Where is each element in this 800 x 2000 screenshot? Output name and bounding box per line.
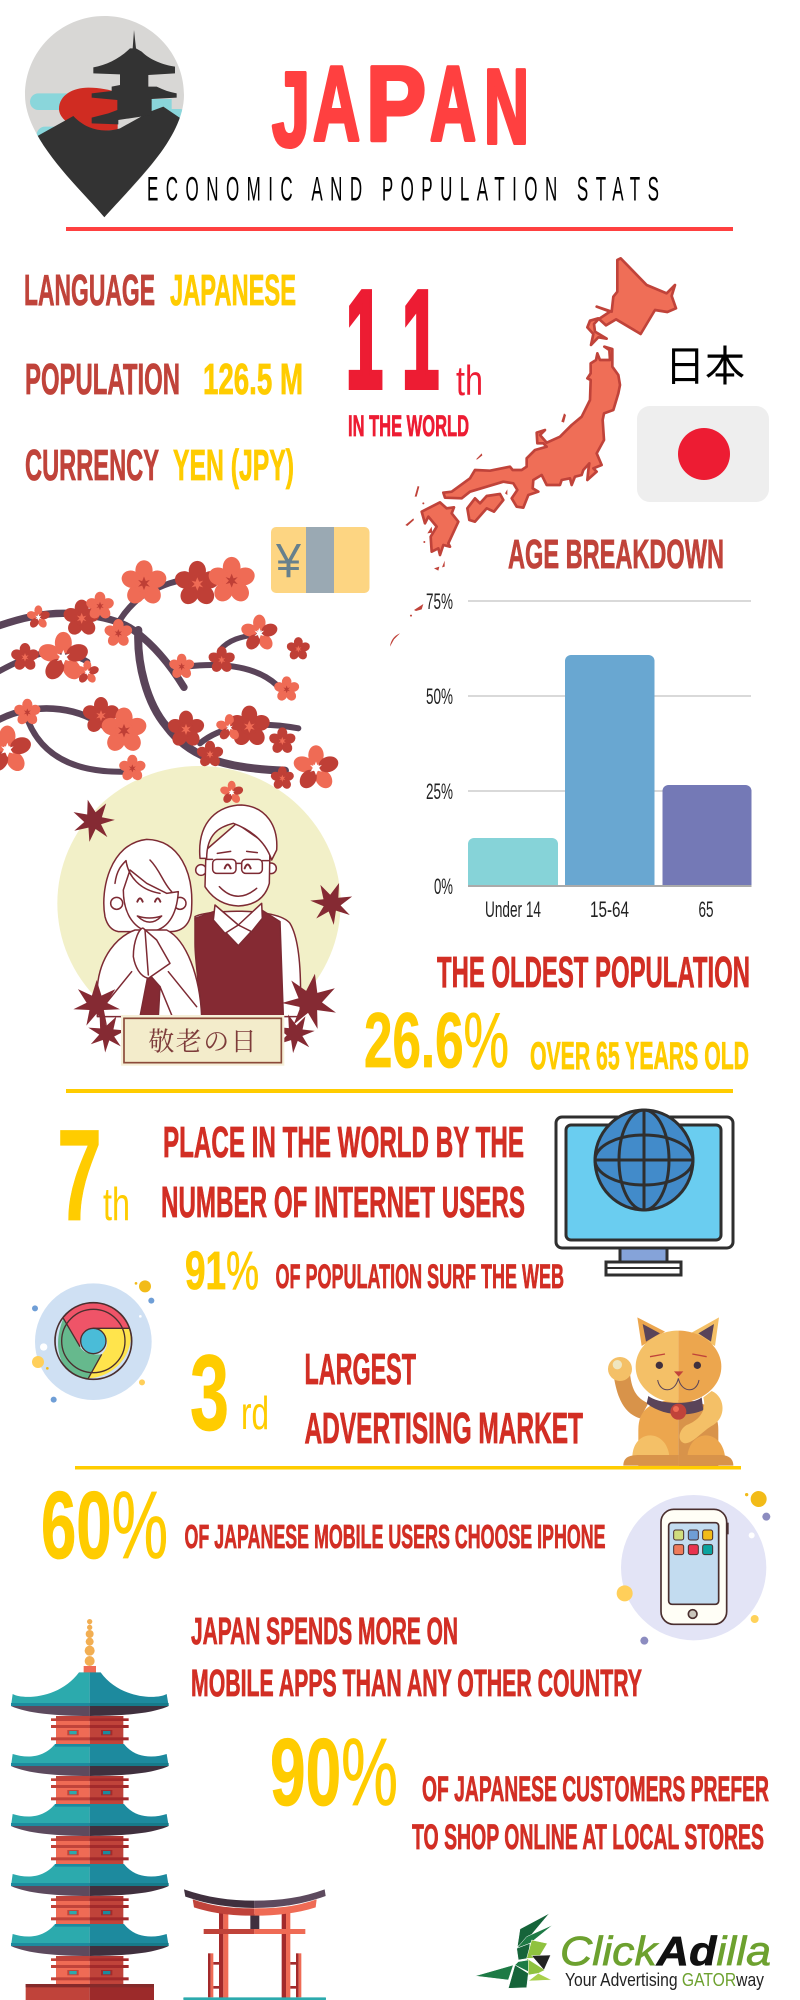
stat: currency: CURRENCY (25, 441, 159, 490)
stat: 90% local stores: 90% (270, 1719, 398, 1826)
stat: 11th in the world: 1 (346, 262, 383, 416)
subtitle: ECONOMIC AND POPULATION STATS (147, 170, 659, 208)
illustration: pagoda (11, 1619, 169, 2000)
illustration: elderly couple: 敬老の日 (148, 1022, 257, 1059)
stat: 60% iPhone (41, 1472, 606, 1579)
stat: 3rd: rd (241, 1387, 269, 1439)
title: A (430, 45, 476, 163)
stat: currency: YEN (JPY) (173, 441, 294, 490)
bar chart: age breakdown: 75% (426, 589, 453, 614)
yellow divider 2 (75, 1466, 741, 1470)
stat: 7th: 7 (57, 1102, 102, 1248)
stat: 7th: th (103, 1178, 130, 1230)
bar chart: age breakdown: 50% (426, 684, 453, 709)
yellow divider (66, 1089, 733, 1093)
stat: 11th in the world: IN THE WORLD (348, 410, 469, 443)
stat: language: JAPANESE (170, 266, 296, 315)
icon: smartphone (617, 1491, 770, 1645)
advertising market text: LARGEST (304, 1345, 416, 1394)
title: A (313, 45, 360, 163)
logo mark: origami gator (475, 1913, 553, 1988)
map of Japan (390, 258, 676, 647)
stat: 90% local stores (270, 1719, 769, 1857)
bar chart: age breakdown: 65 (698, 897, 714, 922)
advertising market text (304, 1345, 583, 1453)
advertising market text: ADVERTISING MARKET (304, 1404, 583, 1453)
logo: ClickAdilla (475, 1913, 771, 1990)
stat: 11th in the world: th (456, 357, 483, 404)
bar chart: age breakdown: 15-64 (590, 897, 629, 922)
stat: 26.6% over 65 (364, 996, 749, 1084)
stat: language: LANGUAGE (24, 266, 155, 315)
bar chart: age breakdown: 0% (434, 874, 453, 899)
icon: location pin with pagoda (25, 16, 187, 217)
stat: 3rd: 3 (190, 1332, 229, 1453)
kanji: Nihon: 日本 (665, 333, 745, 394)
stat: 60% iPhone: 60% (41, 1472, 168, 1579)
icon: chrome browser (32, 1280, 154, 1403)
bar chart: age breakdown: Under 14 (485, 897, 541, 922)
bar chart: age breakdown: 25% (426, 779, 453, 804)
stat: 11th in the world: 1 (402, 262, 439, 416)
stat: population: 126.5 M (203, 355, 303, 404)
stat: 91% surf the web (185, 1241, 564, 1301)
stat: 11th in the world (346, 262, 483, 443)
title: P (366, 45, 426, 163)
title: N (484, 48, 529, 166)
mobile apps text (191, 1611, 642, 1705)
title: J (272, 51, 310, 169)
illustration: elderly couple (57, 766, 359, 1065)
red divider (66, 227, 733, 231)
icon: lucky cat (608, 1317, 733, 1467)
flag of Japan (637, 406, 769, 502)
icon: yen banknote: ¥ (275, 535, 301, 588)
icon: yen banknote (271, 527, 370, 593)
illustration: cherry blossom branches (0, 557, 340, 805)
logo: ClickAdilla: ClickAdilla (560, 1928, 771, 1974)
illustration: torii gate (183, 1889, 326, 2000)
bar chart: age breakdown (426, 589, 752, 922)
icon: monitor with globe (556, 1110, 733, 1275)
internet users text (161, 1118, 525, 1227)
mobile apps text: JAPAN SPENDS MORE ON (191, 1611, 458, 1653)
stat: population: POPULATION (25, 355, 180, 404)
logo: ClickAdilla: Your Advertising GATORway (565, 1970, 764, 1990)
stat: 91% surf the web: 91% (185, 1241, 259, 1301)
stat: 26.6% over 65: 26.6% (364, 996, 509, 1084)
